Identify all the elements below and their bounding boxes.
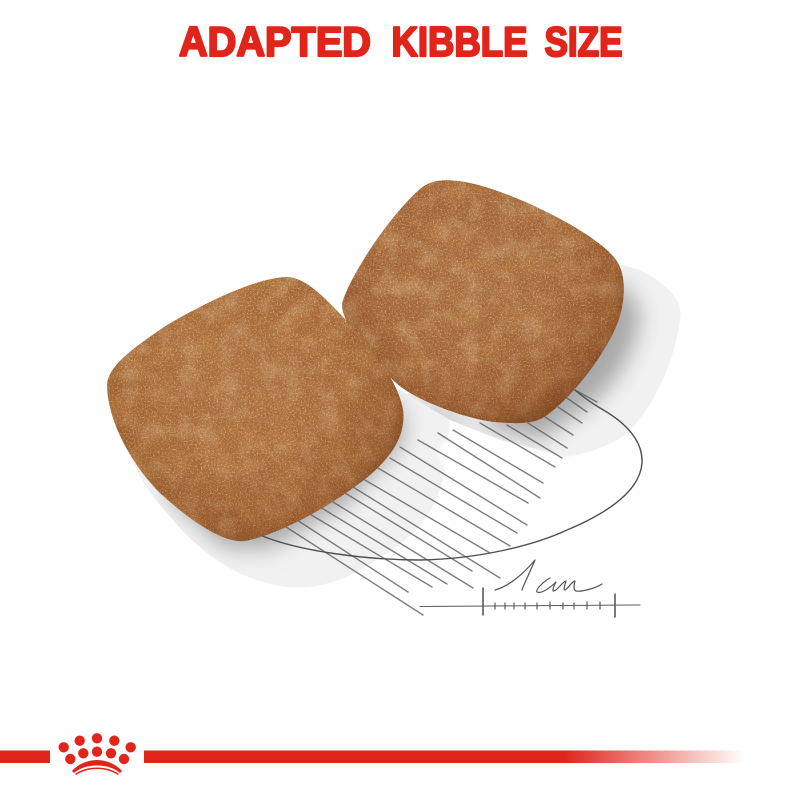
handwritten 1cm label: [495, 560, 602, 592]
1cm scale ruler: [420, 588, 640, 617]
kibble: right: [342, 180, 624, 424]
pencil hatching: [283, 390, 597, 615]
pencil ellipse outline: [260, 390, 642, 560]
kibble: left: [100, 270, 410, 550]
footer bar: left segment: [0, 750, 50, 763]
shadow: left kibble: [100, 390, 460, 590]
title: SIZE: [544, 18, 622, 65]
icon: Royal Canin crown logo: [58, 733, 136, 775]
white highlight inside the ellipse: [430, 425, 660, 565]
title: [179, 18, 622, 65]
footer bar: right segment with fade: [144, 750, 745, 763]
title: ADAPTED: [179, 18, 371, 65]
shadow: right kibble: [407, 265, 680, 457]
title: KIBBLE: [392, 18, 528, 65]
